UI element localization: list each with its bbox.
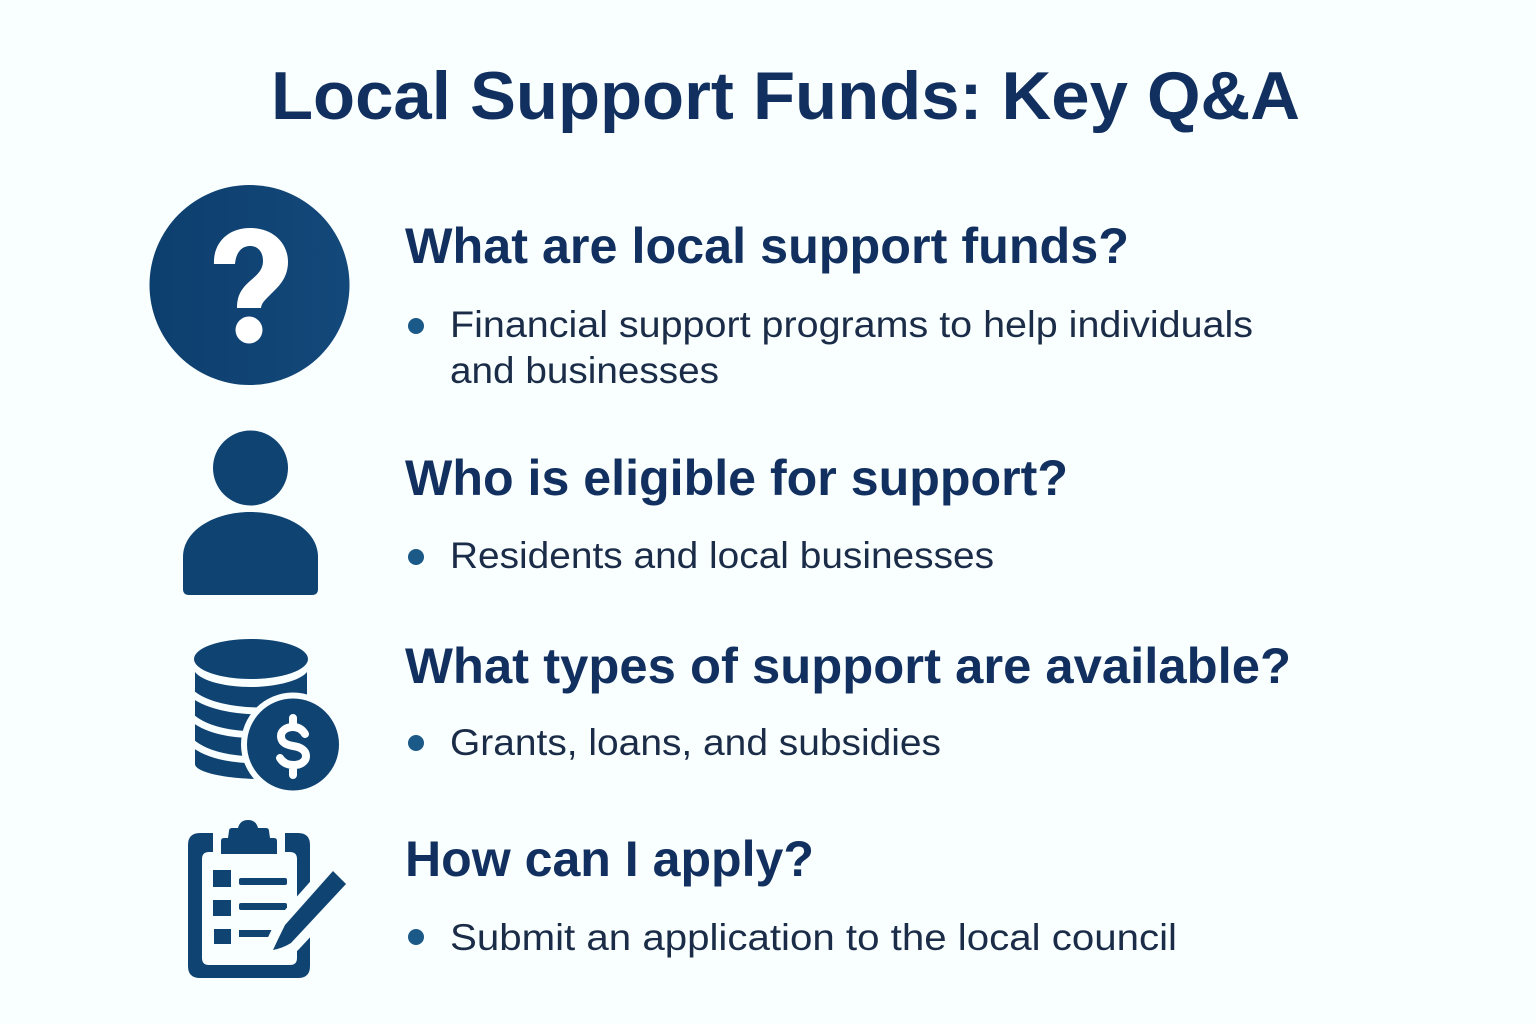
text: answer 4: Submit an application to the local council [450,916,1177,958]
icon: person [183,430,318,595]
panel: how to apply [188,820,1177,978]
bullet [408,735,424,751]
heading: question 4: How can I apply? [405,831,814,887]
icon: coin stack with dollar [190,639,345,796]
panel: what are local support funds [150,185,1253,391]
bullet [408,549,424,565]
text: answer 1: Financial support programs to help individuals [450,303,1253,345]
bullet [408,929,424,945]
icon: clipboard and pen [188,820,346,978]
text: answer 1: and businesses [450,349,719,391]
panel: who is eligible [183,430,1068,595]
icon: question mark [150,185,350,385]
panel: types of support [190,638,1291,796]
text: answer 2: Residents and local businesses [450,534,994,576]
heading: question 3: What types of support are available? [405,638,1291,694]
text: answer 1 [450,303,1253,391]
heading: question 2: Who is eligible for support? [405,450,1068,506]
heading: question 1: What are local support funds? [405,218,1129,274]
bullet [408,318,424,334]
title: Local Support Funds: Key Q&A [271,58,1300,134]
text: answer 3: Grants, loans, and subsidies [450,721,941,763]
